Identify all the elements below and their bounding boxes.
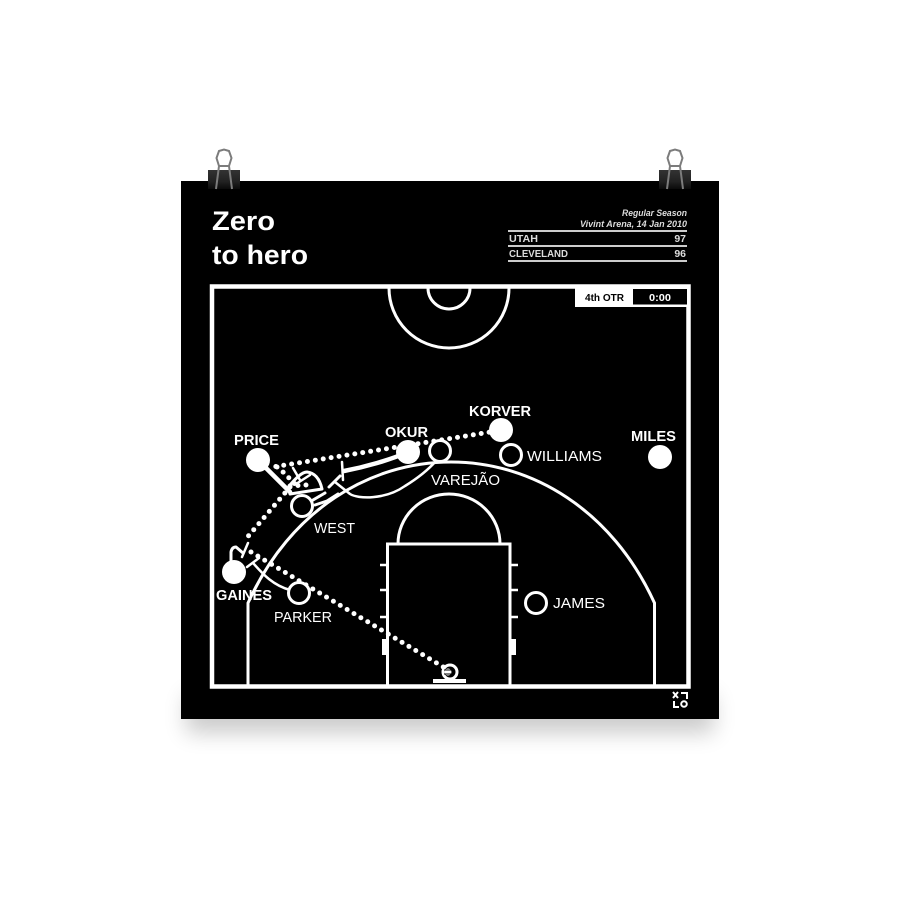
defender: West [292,496,355,537]
player: Gaines [216,560,272,604]
icon: left binder clip [208,150,240,189]
varejao path [335,461,436,497]
key hash marks [380,565,518,617]
score table: UTAH [509,233,538,245]
title [212,206,308,270]
defender: Varejao: VAREJÃO [431,472,500,489]
okur run [344,452,408,471]
defender: James: JAMES [553,596,605,612]
title: Zero [212,206,275,236]
backboard and hoop [433,665,466,683]
price run [258,460,290,492]
game info [580,208,687,229]
defender: Varejao [430,440,500,489]
defender: Parker: PARKER [274,610,332,626]
free throw arc [398,494,500,544]
player: Price [234,433,279,472]
player movement lines [231,452,436,590]
pass trajectories [245,431,497,668]
defender: West: WEST [314,521,355,537]
game info: Vivint Arena, 14 Jan 2010 [580,219,687,229]
inner circle [428,288,470,309]
game clock: 0:00 [649,292,671,304]
west screen loop [290,472,322,494]
poster shadow [186,695,714,733]
score table: CLEVELAND [509,248,568,260]
game clock [575,287,688,307]
poster background [181,181,719,719]
title: to hero [212,240,308,270]
player: Korver: KORVER [469,404,532,420]
player: Price: PRICE [234,433,279,449]
center circle [389,288,509,348]
court [212,286,688,686]
player: Korver [469,404,532,442]
player: Gaines: GAINES [216,588,272,604]
defender: Williams: WILLIAMS [527,449,602,465]
score table: 96 [674,248,686,260]
game clock: 4th OTR [585,293,625,304]
score table [508,230,687,262]
lane blocks [382,639,516,655]
game info: Regular Season [622,208,687,218]
player: Miles [631,429,676,469]
defender: James [526,592,605,614]
gaines path [231,547,243,562]
key [388,544,510,686]
three point line [248,462,654,686]
score table: 97 [674,233,686,245]
icon: right binder clip [659,150,691,189]
defender: Parker [274,582,332,626]
logo [673,692,687,707]
player: Okur: OKUR [385,425,429,441]
player: Okur [385,425,429,464]
player: Miles: MILES [631,429,676,445]
defender: Williams [500,444,602,466]
